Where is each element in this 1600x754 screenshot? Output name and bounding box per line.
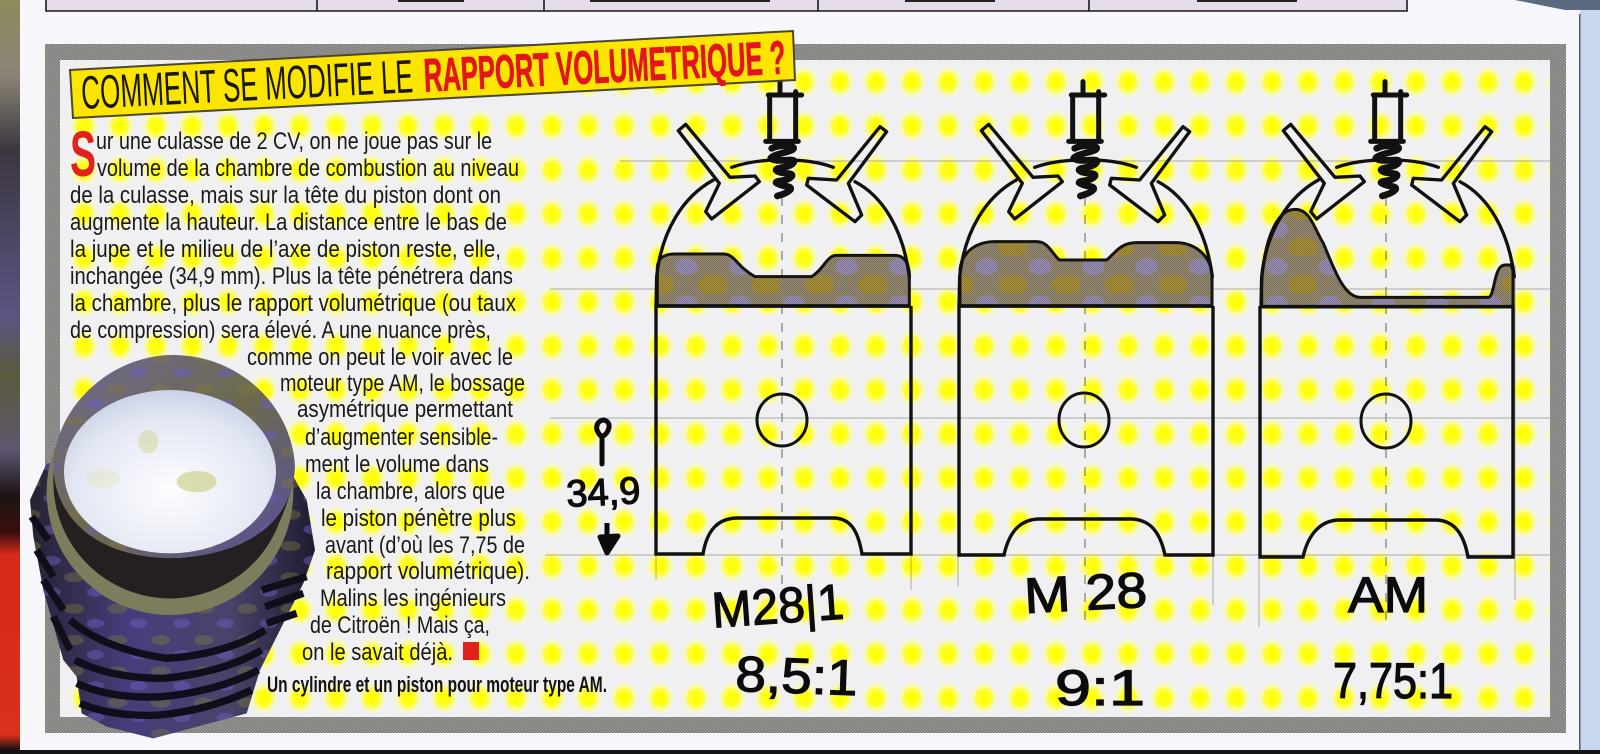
paragraph: inchangée (34,9 mm). Plus la tête pénétrera dans — [70, 263, 513, 290]
cylinder top ring — [53, 355, 295, 558]
top table fragment — [46, 0, 1407, 11]
paragraph: comme on peut le voir avec le — [247, 344, 513, 371]
reference lines — [545, 161, 1550, 628]
dimension label: 34,9 — [565, 470, 641, 516]
paragraph: ment le volume dans — [305, 451, 489, 478]
piston 2 pin — [1059, 393, 1109, 447]
paragraph: rapport volumétrique). — [326, 558, 530, 585]
label M28/1: M28|1 — [710, 574, 846, 639]
paragraph: la jupe et le milieu de l’axe de piston reste, elle, — [70, 236, 501, 263]
title text: COMMENT SE MODIFIE LE — [80, 49, 414, 119]
ring mottling — [53, 355, 295, 558]
inner wall overlap — [53, 473, 292, 598]
paragraph: de Citroën ! Mais ça, — [310, 612, 490, 639]
piston 1 skirt — [656, 306, 911, 554]
title banner — [70, 30, 795, 119]
paragraph: d’augmenter sensible- — [305, 424, 498, 451]
dimension: 34,9 — [565, 420, 641, 553]
body mottling — [30, 463, 315, 738]
left edge photo strip — [0, 0, 20, 750]
piston 1 pin — [757, 394, 807, 446]
banner shape — [70, 31, 795, 118]
paragraph: le piston pénètre plus — [321, 505, 516, 532]
dimension bottom arrow — [600, 523, 618, 553]
piston 2 crown — [959, 242, 1213, 306]
label M28: M 28 — [1023, 562, 1148, 624]
paragraph — [70, 128, 530, 666]
cylinder finned body — [30, 463, 315, 738]
label 8,5:1: 8,5:1 — [735, 646, 859, 706]
piston 1 crown — [656, 254, 910, 306]
photo caption: Un cylindre et un piston pour moteur type AM. — [267, 672, 607, 697]
end mark — [463, 642, 479, 660]
piston surface tints — [87, 430, 217, 492]
right edge blue page — [1515, 0, 1600, 754]
piston 3: AM — [1260, 82, 1514, 557]
paragraph: volume de la chambre de combustion au niveau — [97, 155, 519, 182]
cylinder collar — [47, 368, 293, 615]
paragraph: Malins les ingénieurs — [320, 585, 506, 612]
piston 3 skirt — [1260, 306, 1513, 557]
piston 3 head and valves — [1261, 82, 1514, 306]
paragraph: moteur type AM, le bossage — [280, 370, 525, 397]
piston 1: M28/1 — [656, 82, 911, 554]
title text: RAPPORT VOLUMETRIQUE ? — [422, 30, 787, 102]
piston 3 pin — [1361, 394, 1411, 448]
paragraph: on le savait déjà. — [302, 639, 453, 666]
bottom page edge — [0, 750, 1600, 754]
label 7,75:1: 7,75:1 — [1333, 653, 1453, 709]
paragraph: la chambre, plus le rapport volumétrique (ou taux — [70, 290, 516, 317]
cylinder inner wall — [53, 365, 287, 598]
paragraph: la chambre, alors que — [316, 478, 505, 505]
label AM: AM — [1348, 567, 1428, 623]
cylinder fins — [32, 517, 307, 715]
body text — [70, 118, 530, 666]
paragraph: augmente la hauteur. La distance entre le bas de — [70, 209, 507, 236]
paragraph: de la culasse, mais sur la tête du piston dont on — [70, 182, 501, 209]
paragraph: asymétrique permettant — [297, 396, 513, 423]
paragraph: de compression) sera élevé. A une nuance près, — [70, 317, 491, 344]
piston 2 head and valves — [959, 82, 1212, 306]
paragraph: ur une culasse de 2 CV, on ne joue pas sur le — [96, 128, 492, 155]
dimension top arrow — [597, 420, 609, 464]
piston 2 skirt — [959, 306, 1213, 555]
piston 1 head and valves — [656, 82, 909, 306]
piston 2: M28 — [959, 82, 1213, 555]
drop cap: S — [70, 118, 96, 190]
piston crown in photo — [64, 390, 276, 553]
paragraph: avant (d’où les 7,75 de — [325, 532, 525, 559]
label 9:1: 9:1 — [1055, 660, 1145, 716]
engine labels — [710, 562, 1453, 716]
photo: cylinder and piston — [30, 355, 315, 738]
piston 3 crown — [1260, 209, 1514, 307]
